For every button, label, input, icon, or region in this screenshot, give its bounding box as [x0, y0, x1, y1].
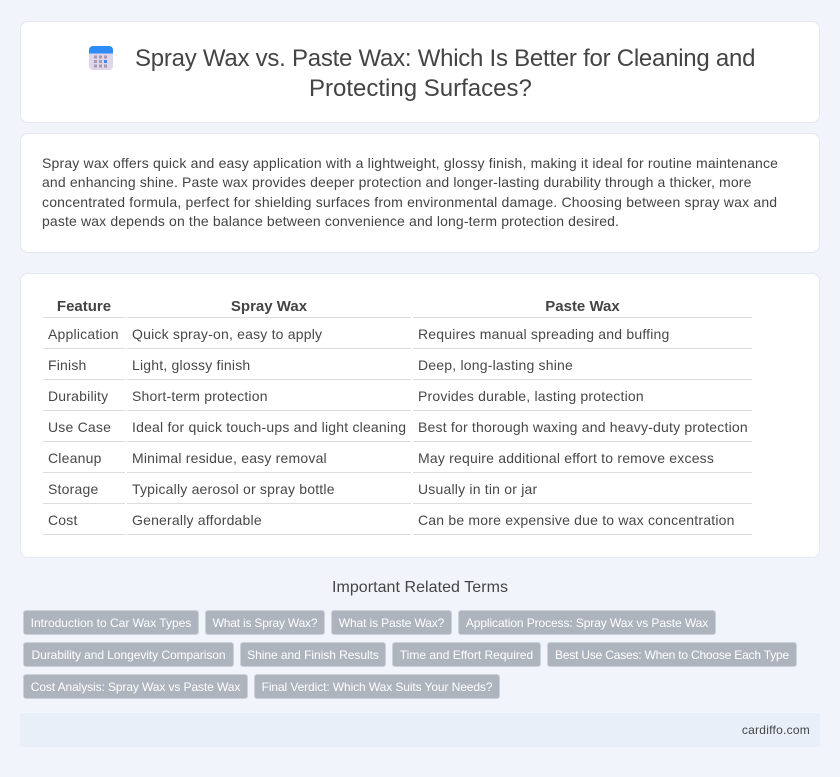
text: Deep, long-lasting shine [418, 357, 573, 373]
text: Durability [48, 388, 108, 404]
text: Can be more expensive due to wax concentration [418, 512, 735, 528]
comparison table [43, 298, 752, 535]
text: May require additional effort to remove excess [418, 450, 714, 466]
text: Cost [48, 512, 78, 528]
text: Cleanup [48, 450, 102, 466]
text: What is Spray Wax? [213, 616, 317, 630]
text: Cost Analysis: Spray Wax vs Paste Wax [31, 680, 240, 694]
row: storage [48, 481, 537, 497]
panel: comparison table card [20, 273, 820, 558]
panel: title card [20, 21, 820, 123]
table header [57, 298, 620, 315]
intro paragraph: Spray wax offers quick and easy application with a lightweight, glossy finish, making it ideal for routine maintenance [42, 155, 778, 171]
text: Best Use Cases: When to Choose Each Type [555, 648, 789, 662]
row: use case [48, 419, 748, 435]
heading: important related terms: Important Related Terms [332, 579, 508, 596]
text: Paste Wax [545, 298, 620, 315]
footer bar [20, 713, 820, 747]
text: Usually in tin or jar [418, 481, 537, 497]
title: Protecting Surfaces? [309, 75, 532, 102]
text: Durability and Longevity Comparison [31, 648, 226, 662]
text: Generally affordable [132, 512, 262, 528]
text: Shine and Finish Results [247, 648, 379, 662]
intro paragraph: paste wax depends on the balance between convenience and long-term protection desired. [42, 213, 619, 229]
text: Provides durable, lasting protection [418, 388, 644, 404]
title [135, 45, 755, 102]
text: Time and Effort Required [400, 648, 533, 662]
panel: intro text card [20, 133, 820, 253]
text: Ideal for quick touch-ups and light cleaning [132, 419, 406, 435]
intro paragraph: concentrated formula, perfect for shielding surfaces from environmental damage. Choosing between spray wax and [42, 194, 777, 210]
row: finish [48, 357, 573, 373]
footer source text: cardiffo.com [742, 723, 810, 737]
text: Minimal residue, easy removal [132, 450, 327, 466]
row: cost [48, 512, 735, 528]
text: Finish [48, 357, 87, 373]
text: Storage [48, 481, 98, 497]
text: Requires manual spreading and buffing [418, 326, 670, 342]
intro paragraph: and enhancing shine. Paste wax provides deeper protection and longer-lasting durability through a thicker, more [42, 174, 752, 190]
text: Application [48, 326, 119, 342]
text: Feature [57, 298, 111, 315]
text: Introduction to Car Wax Types [31, 616, 191, 630]
intro paragraph [42, 155, 778, 229]
text: Light, glossy finish [132, 357, 250, 373]
row: cleanup [48, 450, 714, 466]
related term tags [23, 610, 797, 699]
text: Final Verdict: Which Wax Suits Your Needs? [262, 680, 492, 694]
row: durability [48, 388, 644, 404]
text: What is Paste Wax? [339, 616, 444, 630]
text: Typically aerosol or spray bottle [132, 481, 335, 497]
text: Best for thorough waxing and heavy-duty protection [418, 419, 748, 435]
title: Spray Wax vs. Paste Wax: Which Is Better for Cleaning and [135, 45, 755, 72]
text: Use Case [48, 419, 111, 435]
row: application [48, 326, 670, 342]
text: Short-term protection [132, 388, 268, 404]
text: Quick spray-on, easy to apply [132, 326, 322, 342]
text: Spray Wax [231, 298, 307, 315]
text: Application Process: Spray Wax vs Paste Wax [466, 616, 708, 630]
icon: calendar app [89, 46, 113, 70]
